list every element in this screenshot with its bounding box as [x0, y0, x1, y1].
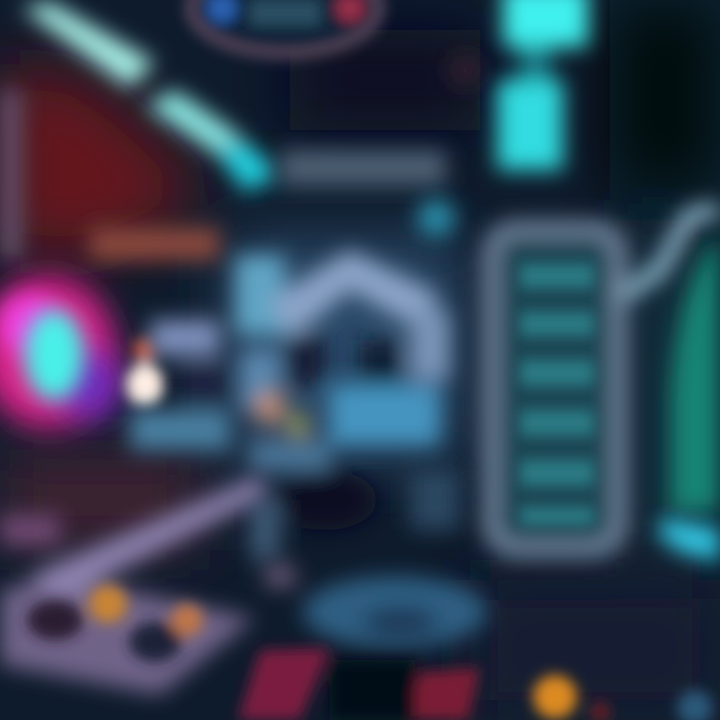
floor pad: blue ellipse [265, 565, 487, 648]
connector cable to right tank [622, 210, 720, 295]
ceiling ring fixture [190, 0, 380, 54]
ceiling light: left streaks [22, 2, 280, 192]
magenta glowing orb [0, 276, 120, 428]
orange floor light [533, 675, 713, 720]
green tank on right [670, 235, 720, 512]
left wall pipe and orange shelf [2, 54, 481, 260]
ladder panel: teal rungs [520, 264, 594, 525]
ladder panel: outlined rack [490, 228, 620, 550]
cyan base of right tank [658, 518, 720, 562]
ceiling light: cyan column [497, 0, 588, 170]
white hot light [126, 338, 164, 407]
console buttons [27, 585, 203, 662]
red floor strips [238, 648, 480, 720]
central machinery cluster [130, 250, 460, 560]
grey overhead bar [280, 150, 446, 186]
bottom left console [0, 475, 268, 695]
